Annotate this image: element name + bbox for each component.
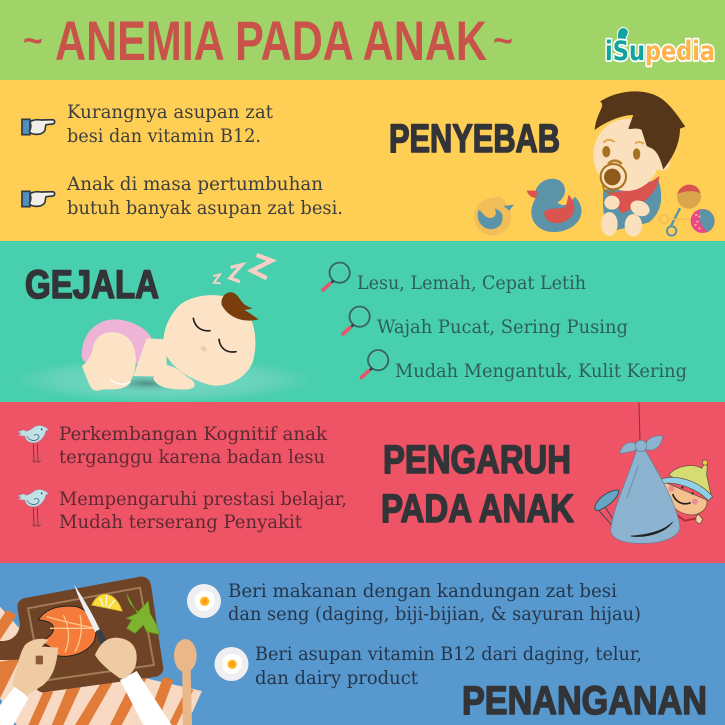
text: cause 2: Anak di masa pertumbuhan [66, 174, 323, 195]
spoon [174, 639, 197, 725]
icon: fried egg 1 [187, 584, 221, 618]
heading: pengaruh pada anak [381, 438, 574, 531]
icon: bird 2 [18, 490, 49, 526]
text: treatment 2: Beri asupan vitamin B12 dari daging, telur, [255, 644, 642, 665]
text: treatment 1: Beri makanan dengan kandungan zat besi [228, 581, 617, 602]
logo: iSupedia: iSu [605, 36, 645, 67]
zzz [213, 255, 272, 283]
panel: gejala [0, 241, 725, 403]
baby head [593, 91, 685, 191]
text: symptoms: Lesu, Lemah, Cepat Letih [357, 273, 586, 294]
towel [0, 607, 202, 725]
pacifier [601, 161, 626, 192]
rattle [660, 185, 715, 236]
text: symptoms: Wajah Pucat, Sering Pusing [377, 317, 628, 338]
text: symptoms: Mudah Mengantuk, Kulit Kering [395, 361, 687, 382]
icon: pointing hand 2 [22, 191, 55, 207]
lemon [92, 594, 122, 611]
text: cause 2: butuh banyak asupan zat besi. [67, 198, 343, 219]
illustration: sleeping baby [13, 255, 313, 403]
title: ANEMIA PADA ANAK [55, 9, 487, 72]
heading: pengaruh pada anak: PENGARUH [383, 438, 571, 482]
text: effect 2: Mudah terserang Penyakit [59, 512, 303, 533]
panel: penyebab [0, 80, 725, 241]
knife [74, 584, 111, 653]
text: effect 2 [59, 489, 347, 533]
left hand [0, 639, 58, 725]
icon: magnifier 2 [343, 307, 370, 334]
foot [595, 490, 619, 525]
salmon [38, 606, 96, 656]
rope [637, 403, 641, 442]
panel: pengaruh [0, 402, 725, 563]
text: treatment 1 [228, 581, 641, 625]
logo: iSupedia [605, 28, 715, 67]
icon: pointing hand 1 [22, 119, 55, 135]
text: symptoms [357, 273, 687, 382]
illustration: baby in hanging bundle [595, 403, 713, 543]
icon: magnifier 3 [361, 350, 388, 377]
illustration: baby with toys [474, 91, 715, 237]
parsley [126, 593, 159, 634]
title: ~ [493, 22, 513, 60]
text: treatment 2 [255, 644, 642, 689]
title: ~ [23, 22, 43, 60]
baby bottom and legs [82, 319, 195, 391]
big duck [527, 179, 581, 232]
bundle [611, 436, 680, 543]
floor shadow [13, 357, 313, 403]
icon: bird 1 [18, 426, 49, 462]
board [0, 577, 163, 692]
text: treatment 2: dan dairy product [255, 668, 419, 689]
panel: title banner [0, 0, 725, 80]
right hand [95, 638, 172, 725]
illustration: cutting board with salmon [0, 577, 202, 725]
text: cause 2 [66, 174, 343, 219]
text: cause 1 [67, 102, 274, 147]
heading: gejala: GEJALA [25, 263, 159, 307]
text: effect 1: terganggu karena badan lesu [59, 447, 325, 468]
baby face [661, 460, 713, 524]
text: treatment 1: dan seng (daging, biji-bijian, & sayuran hijau) [228, 604, 641, 625]
icon: fried egg 2 [214, 647, 248, 681]
text: effect 2: Mempengaruhi prestasi belajar, [59, 489, 347, 510]
text: effect 1 [59, 424, 328, 468]
text: cause 1: Kurangnya asupan zat [67, 102, 274, 123]
baby head [163, 292, 259, 386]
heading: pengaruh pada anak: PADA ANAK [381, 487, 574, 531]
text: cause 1: besi dan vitamin B12. [67, 126, 261, 147]
heading: penyebab: PENYEBAB [389, 117, 560, 161]
text: effect 1: Perkembangan Kognitif anak [59, 424, 328, 445]
icon: magnifier 1 [323, 263, 350, 290]
baby body [601, 176, 661, 237]
panel: penanganan [0, 563, 725, 725]
small duck [474, 197, 514, 235]
